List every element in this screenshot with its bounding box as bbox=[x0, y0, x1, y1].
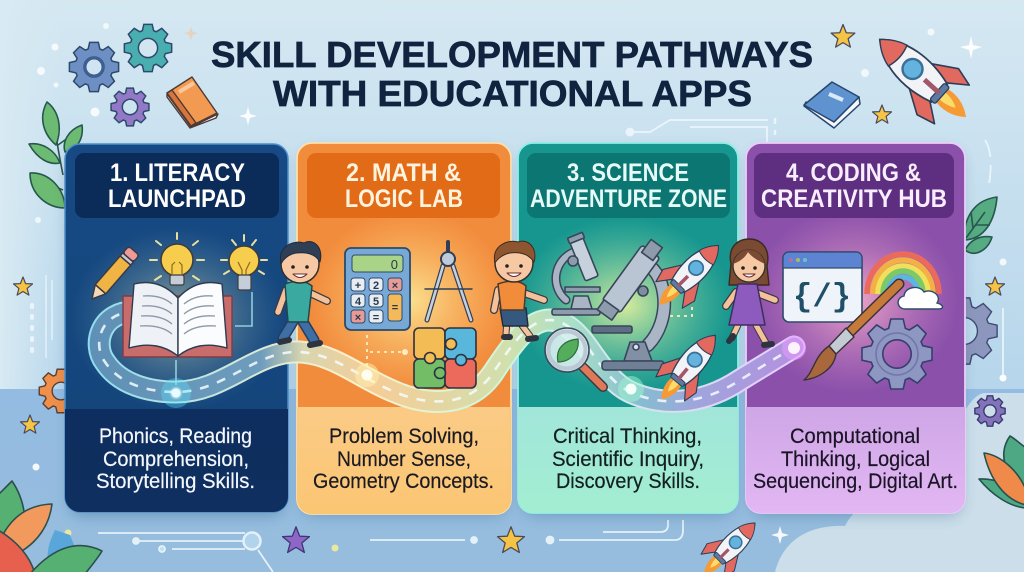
icon: lightbulb right bbox=[221, 235, 267, 290]
icon: puzzle bbox=[414, 328, 476, 388]
panel 3 lower section bbox=[518, 407, 738, 513]
icon: cloud bbox=[898, 287, 943, 309]
panel 3 skills text: Scientific Inquiry, bbox=[552, 448, 704, 471]
icon: calculator: + bbox=[355, 280, 361, 292]
icon: leaves bottom right bbox=[979, 436, 1024, 508]
icon: gear panel 4 bbox=[862, 319, 932, 389]
icon: rocket top right bbox=[859, 17, 987, 140]
panel: 2 math and logic lab bbox=[297, 143, 511, 516]
icon: microscope small bbox=[552, 232, 600, 315]
icon: gears top left bbox=[69, 24, 172, 126]
icon: boy walking 1 bbox=[278, 242, 327, 345]
panel: 4 coding and creativity hub bbox=[746, 143, 965, 516]
icon: star right bbox=[986, 277, 1004, 295]
panel 4 skills text: Thinking, Logical bbox=[781, 448, 930, 471]
icon: rocket panel 3 upper bbox=[644, 230, 734, 320]
icon: calculator: = bbox=[392, 302, 398, 314]
icon: leaves top left bbox=[29, 102, 82, 208]
panel 2 skills text bbox=[313, 425, 494, 493]
panel 1 skills text bbox=[96, 425, 255, 493]
icon: orange book bbox=[167, 77, 218, 128]
panel 2 header: LOGIC LAB bbox=[345, 185, 463, 213]
icon: calculator bbox=[345, 248, 410, 330]
icon: compass bbox=[425, 242, 472, 320]
panel 4 glow bbox=[750, 205, 960, 395]
panel 3 header: 3. SCIENCE bbox=[567, 159, 689, 187]
title bbox=[211, 34, 813, 114]
icon: blue book bbox=[804, 82, 860, 128]
panel 1 glow bbox=[70, 226, 286, 410]
panel 3 glow bbox=[517, 217, 733, 393]
panel: 1 literacy launchpad bbox=[65, 144, 288, 516]
icon: small star top right bbox=[872, 105, 892, 123]
icon: pencil bbox=[87, 246, 139, 304]
panel 2 skills text: Number Sense, bbox=[337, 448, 471, 471]
icon: boy walking 2 bbox=[494, 241, 544, 339]
panel 2 skills text: Problem Solving, bbox=[329, 425, 479, 448]
panel 1 skills text: Storytelling Skills. bbox=[96, 470, 255, 493]
panel 4 header bbox=[754, 153, 954, 218]
title: WITH EDUCATIONAL APPS bbox=[273, 73, 752, 114]
panel 2 skills text: Geometry Concepts. bbox=[313, 470, 494, 493]
icon: gear right behind panel bbox=[931, 298, 997, 364]
icon: code window: {/} bbox=[793, 279, 851, 316]
icon: calculator: 0 bbox=[391, 257, 398, 272]
icon: lightbulb left bbox=[150, 233, 204, 285]
panel 3 skills text: Discovery Skills. bbox=[556, 470, 700, 493]
icon: stars left bbox=[14, 277, 40, 433]
panel 3 header: ADVENTURE ZONE bbox=[530, 185, 727, 213]
panel 2 lower section bbox=[297, 407, 511, 514]
panel 1 header bbox=[75, 153, 279, 218]
panel 1 header: 1. LITERACY bbox=[110, 159, 245, 187]
panel 2 header: 2. MATH & bbox=[346, 159, 461, 187]
circuit lines bbox=[32, 118, 1003, 572]
panel 4 skills text: Sequencing, Digital Art. bbox=[753, 470, 958, 493]
panel 4 header: CREATIVITY HUB bbox=[761, 185, 947, 213]
icon: orange gear left bbox=[39, 369, 83, 413]
icon: small purple gear bbox=[975, 396, 1005, 426]
panel 1 header: LAUNCHPAD bbox=[108, 185, 246, 213]
panel 3 header bbox=[527, 153, 730, 218]
icon: calculator: = bbox=[373, 312, 379, 324]
icon: calculator: 4 bbox=[355, 296, 362, 308]
icon: calculator: × bbox=[392, 280, 398, 292]
pathway road bbox=[99, 292, 794, 401]
icon: calculator: × bbox=[355, 312, 361, 324]
icon: leaves bottom left bbox=[0, 481, 102, 572]
icon: rocket panel 3 lower bbox=[644, 321, 732, 414]
panel 4 skills text bbox=[753, 425, 958, 493]
icon: paintbrush bbox=[804, 284, 899, 380]
icon: calculator: 2 bbox=[373, 280, 379, 292]
panel 1 skills text: Phonics, Reading bbox=[99, 425, 252, 448]
icon: magnifier with leaf bbox=[545, 328, 603, 387]
panel 2 glow bbox=[310, 210, 510, 390]
icon: star top right bbox=[831, 24, 855, 47]
icon: calculator: 5 bbox=[373, 296, 379, 308]
panel 1 skills text: Comprehension, bbox=[103, 448, 249, 471]
icon: code window bbox=[783, 252, 862, 322]
icon: rainbow bbox=[867, 254, 939, 294]
icon: open book bbox=[123, 283, 232, 357]
title: SKILL DEVELOPMENT PATHWAYS bbox=[211, 34, 813, 75]
icons: bottom stars and rocket bbox=[283, 509, 769, 572]
panel 2 header bbox=[307, 153, 500, 218]
icon: leaves right bbox=[963, 197, 997, 253]
panel 4 header: 4. CODING & bbox=[786, 159, 921, 187]
panel 1 lower section bbox=[65, 409, 288, 512]
panel 3 skills text: Critical Thinking, bbox=[553, 425, 702, 448]
path nodes bbox=[161, 336, 806, 408]
panel 4 lower section bbox=[746, 407, 965, 513]
panel: 3 science adventure zone bbox=[517, 143, 738, 516]
icon: girl walking bbox=[726, 239, 775, 345]
panel 4 skills text: Computational bbox=[790, 425, 920, 448]
panel 3 skills text bbox=[552, 425, 704, 493]
icon: microscope large bbox=[592, 239, 664, 370]
